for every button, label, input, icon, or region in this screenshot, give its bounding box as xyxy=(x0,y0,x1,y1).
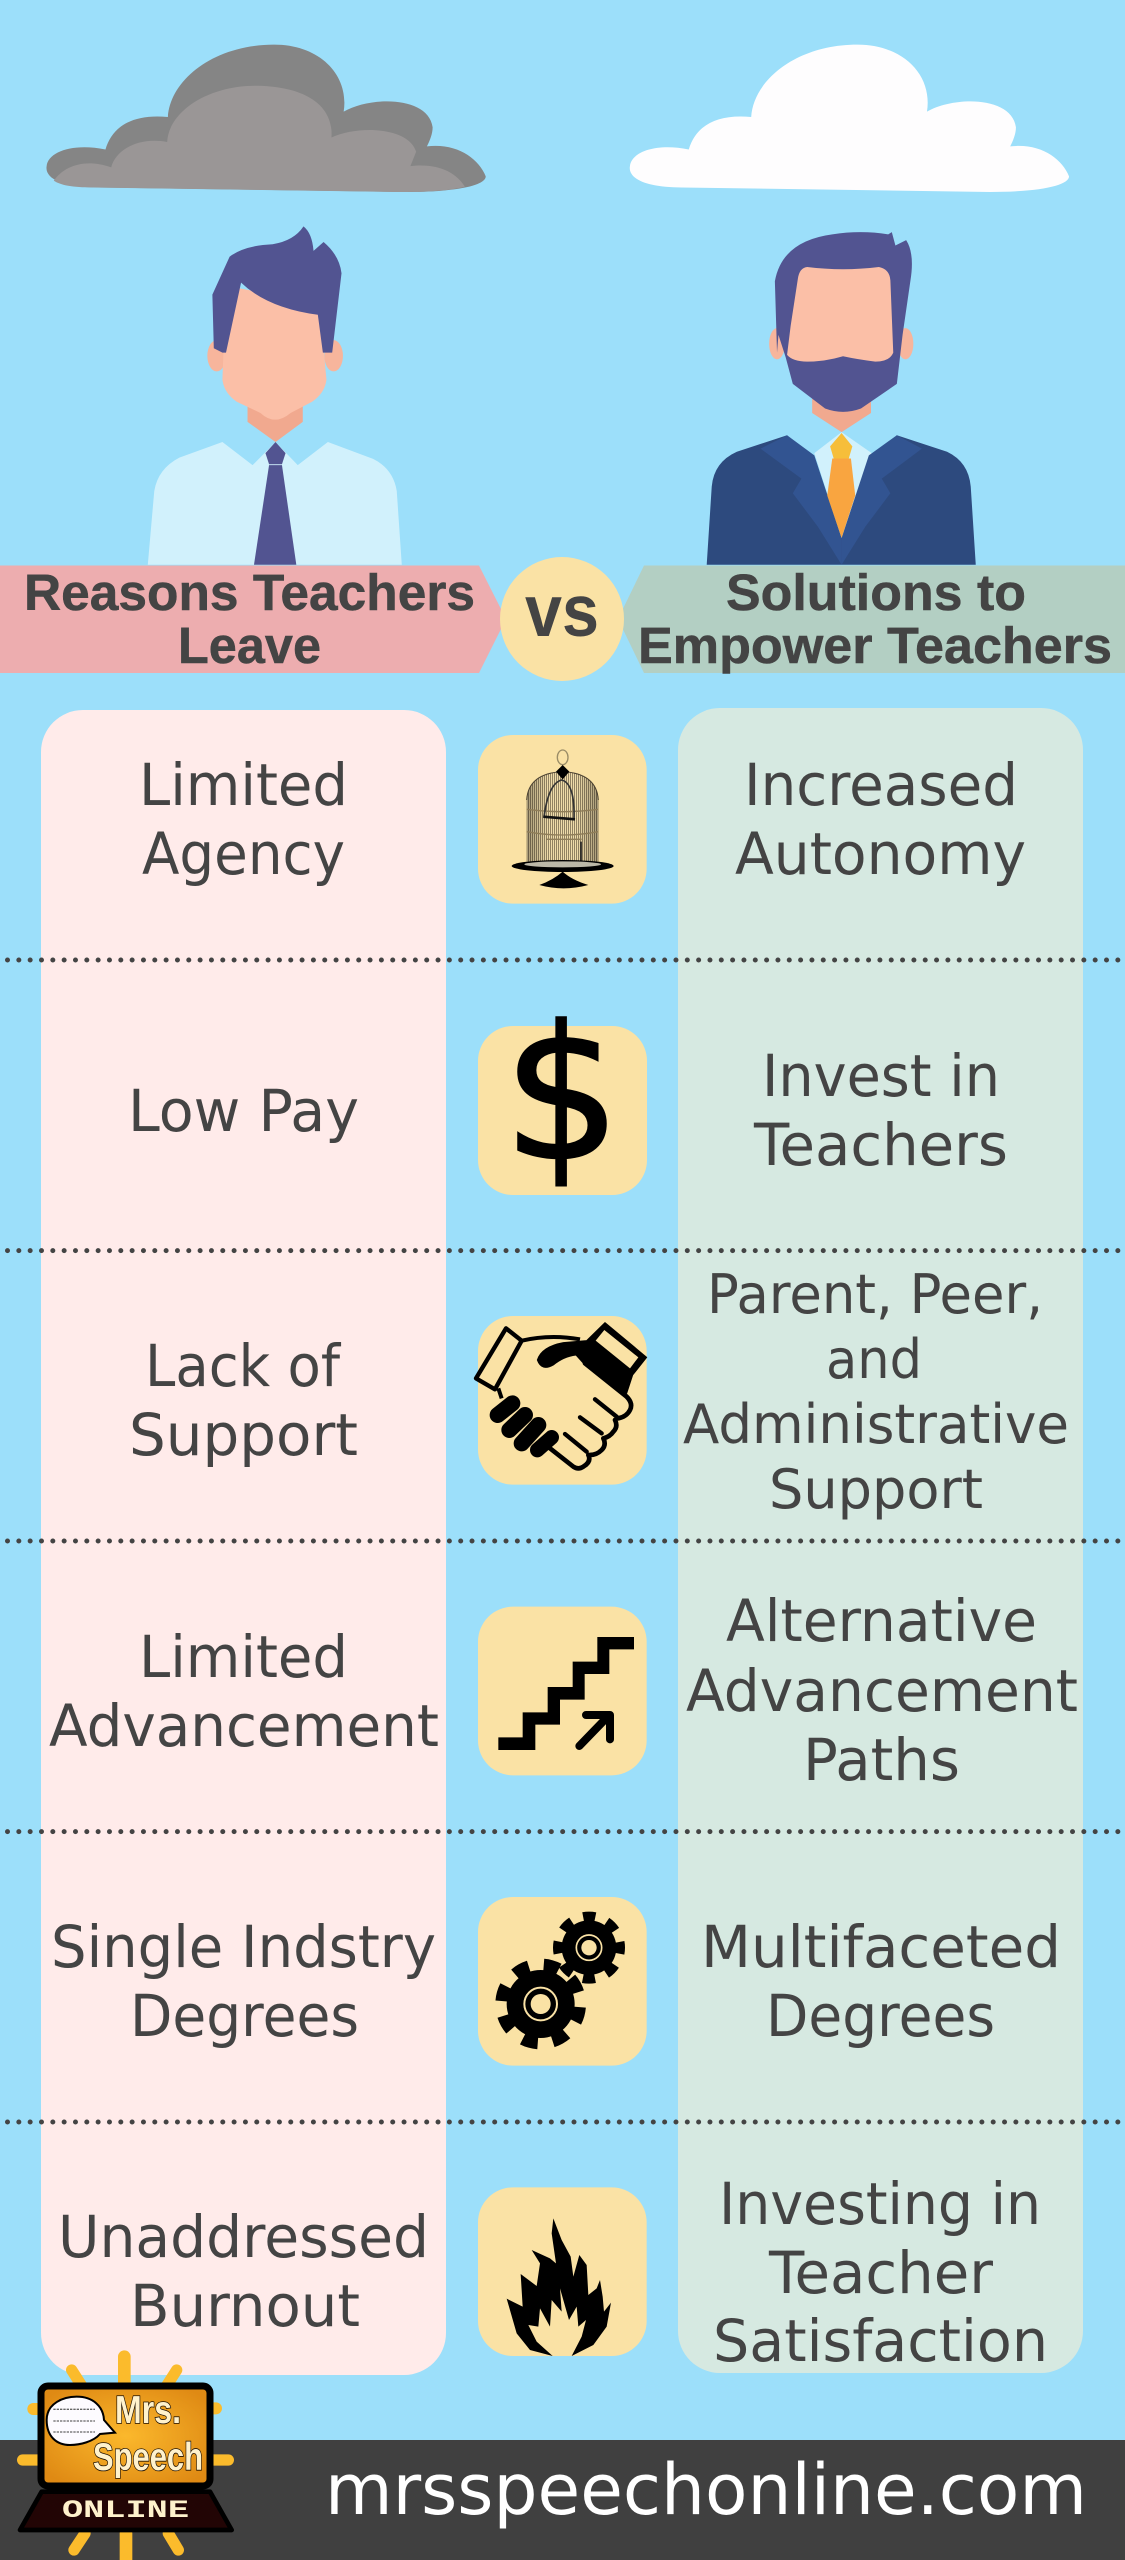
solution: Parent, Peer, and Administrative Support: Parent, Peer, xyxy=(707,1263,1043,1326)
solution: Investing in Teacher Satisfaction: Teacher xyxy=(768,2239,993,2307)
solution: Invest in Teachers xyxy=(753,1042,1008,1179)
banner: Reasons Teachers Leave: Leave xyxy=(178,617,321,674)
icon: birdcage xyxy=(478,735,647,904)
solution: Investing in Teacher Satisfaction xyxy=(713,2170,1048,2375)
badge: vs: vs xyxy=(525,571,599,652)
banner: Solutions to Empower Teachers: Solutions to xyxy=(726,564,1026,621)
banner: Solutions to Empower Teachers xyxy=(618,564,1125,674)
reason: Limited Agency: Agency xyxy=(142,820,345,888)
solution: Parent, Peer, and Administrative Support xyxy=(683,1263,1069,1521)
solution: Alternative Advancement Paths: Paths xyxy=(803,1726,960,1794)
icon: white cloud xyxy=(630,45,1069,192)
icon: dollar sign xyxy=(478,986,647,1202)
illustration: confident teacher in suit with beard xyxy=(707,232,976,565)
solution: Investing in Teacher Satisfaction: Satisfaction xyxy=(713,2307,1048,2375)
reason: Unaddressed Burnout: Burnout xyxy=(130,2272,360,2340)
reason: Lack of Support xyxy=(129,1332,358,1469)
reason: Lack of Support: Lack of xyxy=(145,1332,341,1400)
panel: solutions to empower teachers xyxy=(678,708,1083,2375)
logo: Mrs. Speech Online xyxy=(20,2357,232,2560)
solution: Alternative Advancement Paths: Alternative xyxy=(726,1587,1037,1655)
reason: Single Indstry Degrees: Degrees xyxy=(130,1982,359,2050)
logo text: Mrs.: Mrs. xyxy=(115,2389,181,2432)
icon: dark storm cloud xyxy=(46,45,486,192)
solution: Parent, Peer, and Administrative Support: and xyxy=(826,1328,922,1391)
reason: Limited Advancement xyxy=(49,1623,439,1760)
reason: Single Indstry Degrees xyxy=(51,1913,436,2050)
solution: Multifaceted Degrees xyxy=(701,1913,1061,2050)
icon: dollar sign: $ xyxy=(503,986,621,1202)
panel: reasons teachers leave xyxy=(41,710,446,2375)
banner: Solutions to Empower Teachers: Empower Teachers xyxy=(638,617,1112,674)
reason: Limited Agency xyxy=(139,751,348,888)
icon: flame xyxy=(478,2187,647,2356)
banner: Reasons Teachers Leave: Reasons Teachers xyxy=(24,564,475,621)
reason: Low Pay: Low Pay xyxy=(128,1077,359,1145)
solution: Alternative Advancement Paths: Advancement xyxy=(686,1657,1078,1725)
banner: Reasons Teachers Leave xyxy=(0,564,506,674)
solution: Multifaceted Degrees: Degrees xyxy=(766,1982,995,2050)
solution: Parent, Peer, and Administrative Support: Support xyxy=(769,1458,983,1521)
solution: Invest in Teachers: Invest in xyxy=(762,1042,1000,1110)
reason: Lack of Support: Support xyxy=(129,1401,358,1469)
solution: Alternative Advancement Paths xyxy=(686,1587,1078,1794)
logo text: Speech: Speech xyxy=(93,2436,203,2479)
reason: Single Indstry Degrees: Single Indstry xyxy=(51,1913,436,1981)
solution: Increased Autonomy: Increased xyxy=(744,751,1018,819)
illustration: unhappy teacher in shirt and tie xyxy=(148,226,402,565)
reason: Unaddressed Burnout xyxy=(58,2203,429,2340)
reason: Unaddressed Burnout: Unaddressed xyxy=(58,2203,429,2271)
solution: Investing in Teacher Satisfaction: Investing in xyxy=(719,2170,1041,2238)
logo rays xyxy=(23,2357,228,2560)
solution: Increased Autonomy xyxy=(735,751,1026,888)
solution: Invest in Teachers: Teachers xyxy=(753,1111,1008,1179)
icon: gears xyxy=(478,1897,647,2066)
logo screen xyxy=(41,2386,210,2486)
solution: Increased Autonomy: Autonomy xyxy=(735,820,1026,888)
reason: Limited Advancement: Limited xyxy=(139,1623,348,1691)
solution: Parent, Peer, and Administrative Support: Administrative xyxy=(683,1393,1069,1456)
icon: stairs with up arrow xyxy=(478,1607,647,1775)
solution: Multifaceted Degrees: Multifaceted xyxy=(701,1913,1061,1981)
reason: Limited Advancement: Advancement xyxy=(49,1692,439,1760)
logo speech bubble xyxy=(47,2397,115,2445)
badge: vs xyxy=(500,557,624,681)
website url: mrsspeechonline.com xyxy=(325,2449,1087,2531)
icon: handshake xyxy=(476,1316,647,1485)
reason: Limited Agency: Limited xyxy=(139,751,348,819)
logo base with ONLINE xyxy=(20,2492,232,2530)
footer bar xyxy=(0,2440,1125,2560)
logo base with ONLINE: ONLINE xyxy=(62,2496,189,2525)
